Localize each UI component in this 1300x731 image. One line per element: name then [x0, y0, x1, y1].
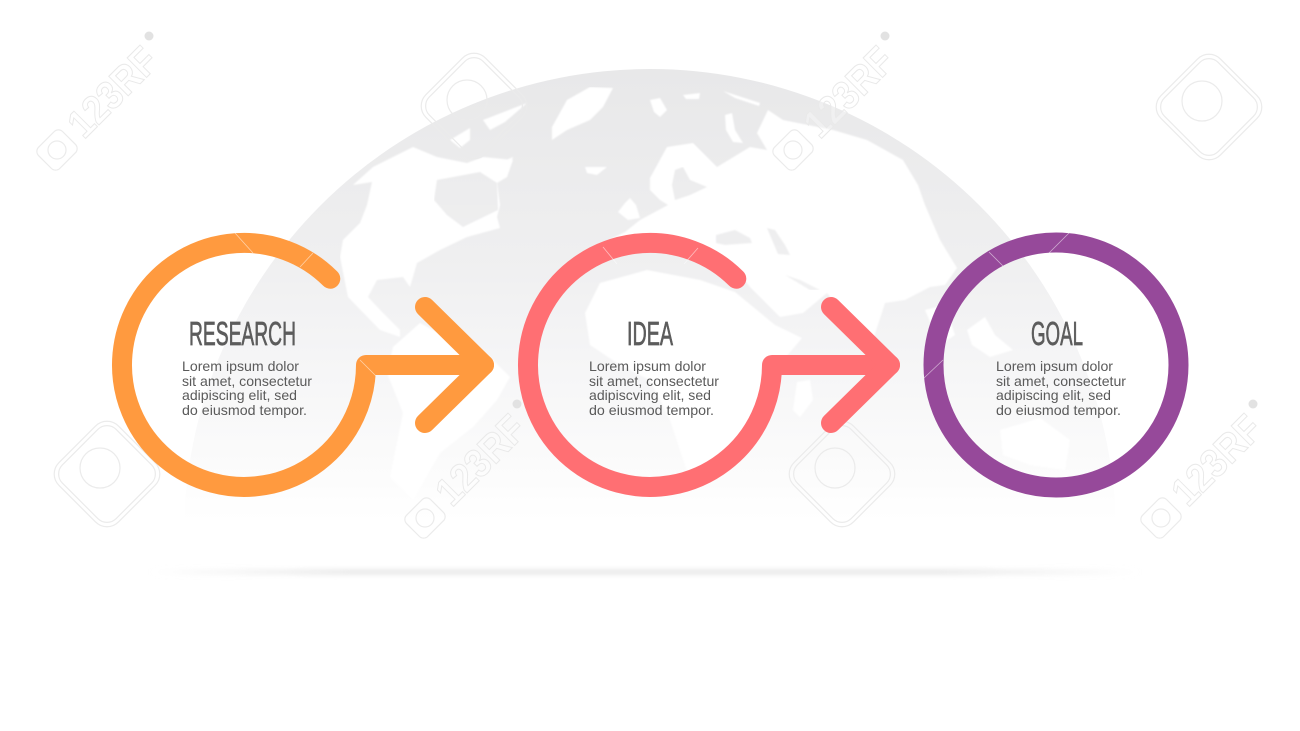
coral ring arrow	[528, 243, 890, 487]
idea body text: do eiusmod tempor.	[589, 402, 714, 418]
watermark: top left logo	[34, 32, 167, 173]
goal body text: Lorem ipsum dolor	[996, 358, 1113, 374]
world map globe background	[184, 69, 1116, 535]
idea body text	[589, 358, 719, 418]
watermark: top right stamp	[1150, 48, 1268, 166]
step 3: goal	[924, 233, 1178, 488]
watermark: lower right logo	[1138, 400, 1271, 541]
goal body text: do eiusmod tempor.	[996, 402, 1121, 418]
goal body text: sit amet, consectetur	[996, 373, 1126, 389]
step 1: research	[122, 233, 484, 487]
goal body text	[996, 358, 1126, 418]
coral seams	[603, 247, 698, 264]
watermark: lower centre-left logo: 123RF	[427, 407, 535, 514]
orange ring arrow	[122, 243, 484, 487]
goal heading: GOAL	[1031, 315, 1083, 352]
research body text: Lorem ipsum dolor	[182, 358, 299, 374]
watermark: lower centre-left logo	[402, 400, 535, 541]
watermark: lower centre-right stamp	[783, 415, 901, 533]
ground shadow	[150, 569, 1140, 575]
watermark: top stamp left	[415, 47, 533, 165]
purple ring	[934, 242, 1178, 488]
idea heading: IDEA	[627, 315, 673, 352]
orange seams	[235, 233, 376, 376]
watermark: lower right logo: 123RF	[1163, 407, 1271, 514]
idea body text: adipiscving elit, sed	[589, 387, 711, 403]
purple seams	[924, 233, 1069, 378]
watermark: lower left stamp	[48, 415, 166, 533]
idea body text: Lorem ipsum dolor	[589, 358, 706, 374]
research body text: adipiscing elit, sed	[182, 387, 297, 403]
research body text: sit amet, consectetur	[182, 373, 312, 389]
watermark: top left logo: 123RF	[59, 39, 167, 146]
research body text: do eiusmod tempor.	[182, 402, 307, 418]
idea body text: sit amet, consectetur	[589, 373, 719, 389]
watermark: top centre logo: 123RF	[795, 39, 903, 146]
watermark: top centre logo	[770, 32, 903, 173]
research body text	[182, 358, 312, 418]
research heading: RESEARCH	[189, 315, 296, 352]
goal body text: adipiscing elit, sed	[996, 387, 1111, 403]
watermark stamps	[34, 32, 1271, 541]
step 2: idea	[528, 243, 890, 487]
